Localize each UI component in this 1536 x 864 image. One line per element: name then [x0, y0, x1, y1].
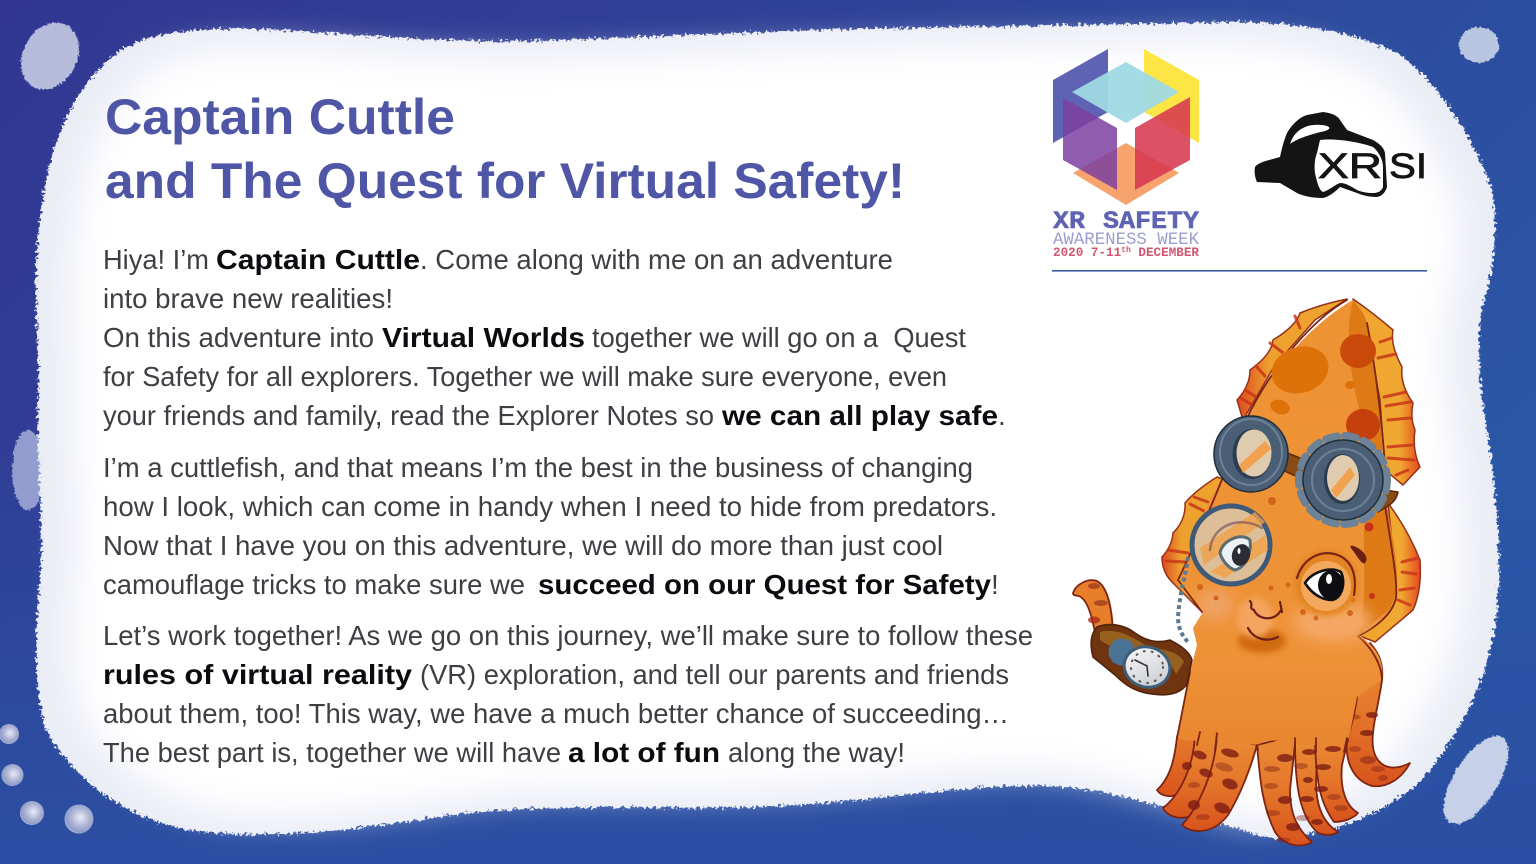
text block: introduction: [103, 244, 1006, 431]
right eye: [1294, 547, 1365, 616]
shaded bands on the right side: [1349, 300, 1400, 636]
logo: XR Safety Awareness Week: 2020 7-11: [1053, 246, 1121, 260]
text block: introduction: Captain Cuttle: [216, 244, 420, 275]
text block: cuttlefish: I’m a cuttlefish, and that means I’m the best in the business of changing: [103, 452, 973, 483]
goggles strap: [1282, 452, 1398, 512]
cheeks and chin: [1197, 589, 1373, 653]
text block: introduction: for Safety for all explorers. Together we will make sure everyone, even: [103, 361, 947, 392]
logo: XR Safety Awareness Week: SAFETY: [1103, 207, 1199, 236]
text block: rules: along the way!: [728, 737, 905, 768]
icon: gear: [1111, 641, 1133, 663]
text block: rules: about them, too! This way, we have a much better chance of succeeding…: [103, 698, 1009, 729]
text block: introduction: Hiya! I’m: [103, 244, 209, 275]
title: [105, 89, 905, 209]
title: and The Quest for Virtual Safety!: [105, 153, 905, 209]
text block: rules: a lot of fun: [568, 737, 720, 768]
logo: XR Safety Awareness Week: th: [1121, 246, 1131, 255]
red spots: [1364, 522, 1375, 599]
text block: cuttlefish: succeed on our Quest for Safety: [538, 569, 991, 600]
text block: introduction: we can all play safe: [721, 400, 998, 431]
divider line: [1052, 270, 1427, 272]
text block: introduction: . Come along with me on an adventure: [420, 244, 893, 275]
goggle: right: [1299, 436, 1387, 524]
monocle chain: [1178, 557, 1188, 642]
logo: XR Safety Awareness Week: DECEMBER: [1131, 246, 1199, 260]
mouth: [1248, 601, 1282, 640]
icon: VR headset: [1255, 112, 1387, 198]
arm: [1073, 580, 1113, 645]
decorative blob: bottom right: [1431, 726, 1521, 834]
tentacles left and centre: [1157, 690, 1358, 845]
icon: translucent cube: [1053, 49, 1199, 205]
wrist cuff with watch: [1091, 625, 1192, 695]
text block: rules: (VR) exploration, and tell our parents and friends: [420, 659, 1009, 690]
text block: cuttlefish: how I look, which can come in handy when I need to hide from predators.: [103, 491, 997, 522]
text block: cuttlefish: !: [991, 569, 999, 600]
monocle: [1192, 506, 1270, 584]
title: Captain Cuttle: [105, 89, 455, 145]
fins: [1162, 299, 1420, 642]
decorative blob: top left: [10, 12, 90, 100]
text block: introduction: On this adventure into: [103, 322, 374, 353]
text block: introduction: Virtual Worlds: [382, 322, 585, 353]
decorative blob: left: [12, 430, 44, 510]
text block: cuttlefish: [103, 452, 999, 600]
logo: XRSI: XR: [1318, 147, 1382, 186]
text block: introduction: into brave new realities!: [103, 283, 393, 314]
body: [1177, 300, 1397, 745]
tentacle 7: [1347, 643, 1410, 786]
text block: rules: [103, 620, 1033, 768]
bubbles: bottom left: [0, 724, 94, 834]
mantle spots: [1265, 334, 1380, 441]
text block: rules: Let’s work together! As we go on this journey, we’ll make sure to follow these: [103, 620, 1033, 651]
tentacle stripes: [1180, 704, 1388, 842]
text block: introduction: your friends and family, read the Explorer Notes so: [103, 400, 714, 431]
goggle: left: [1214, 416, 1288, 492]
text block: cuttlefish: camouflage tricks to make sure we: [103, 569, 525, 600]
text block: rules: The best part is, together we will have: [103, 737, 561, 768]
logo: XRSI: [1255, 112, 1427, 198]
text block: rules: rules of virtual reality: [103, 659, 412, 690]
illustration: Captain Cuttle: [1073, 299, 1420, 845]
logo: XR Safety Awareness Week: XR: [1053, 207, 1085, 236]
body outline: [1177, 300, 1396, 738]
logo: XR Safety Awareness Week: [1053, 49, 1199, 260]
freckles: [1197, 497, 1356, 620]
text block: introduction: together we will go on a Quest: [592, 322, 966, 353]
logo: XR Safety Awareness Week: AWARENESS WEEK: [1053, 230, 1199, 250]
fin stripes: [1166, 316, 1418, 605]
logo: XRSI: SI: [1389, 147, 1427, 186]
text block: introduction: .: [998, 400, 1006, 431]
arm stripes: [1088, 583, 1108, 624]
icon: pocket watch: [1120, 642, 1174, 692]
tentacle separators: [1197, 732, 1347, 752]
text block: cuttlefish: Now that I have you on this adventure, we will do more than just cool: [103, 530, 943, 561]
decorative blob: top right: [1459, 27, 1499, 63]
